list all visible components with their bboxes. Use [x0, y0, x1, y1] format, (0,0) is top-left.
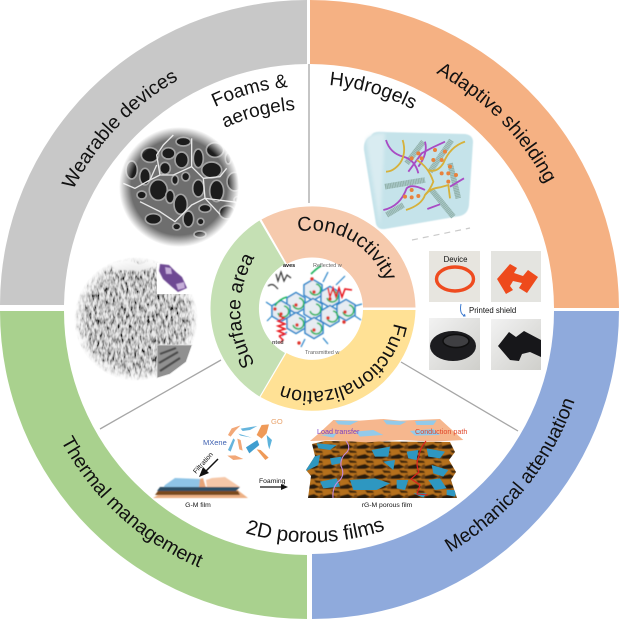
image: hydrogel cube: [364, 132, 473, 240]
labels: flakes: GO: [271, 417, 283, 426]
segment: surface area: [210, 220, 285, 396]
red atoms: [273, 277, 347, 345]
labels: flakes: [203, 417, 283, 447]
image: columnar micrograph: [74, 257, 198, 381]
photo: black ring: [429, 318, 480, 370]
label: transmitted waves: Transmitted w: [305, 350, 339, 356]
absorbed wave swirls: [275, 266, 354, 334]
rG-M film label: rG-M porous film: [362, 502, 413, 509]
G-M film: [153, 477, 248, 498]
label: reflected waves: Reflected w: [313, 263, 342, 269]
heading: foams and aerogels: Foams &: [211, 74, 288, 106]
heading: foams and aerogels: aerogels: [222, 97, 294, 127]
divider lines: [100, 64, 518, 431]
segment: adaptive shielding: [310, 0, 619, 308]
label: absorbed: nted: [272, 340, 284, 346]
image: foam micrograph: [119, 127, 243, 247]
heading: 2D porous films: 2D porous films: [246, 520, 384, 544]
hydrogel polymer strands: [383, 140, 465, 217]
image: 2D porous film schematic: [153, 417, 467, 509]
micrograph texture: [74, 257, 198, 381]
segment: wearable devices: Wearable devices: [61, 72, 177, 186]
segment: conductivity: [262, 206, 416, 308]
photo: black shield block: [491, 319, 541, 370]
lattice spikes: [266, 272, 362, 347]
segment: wearable devices: [0, 0, 307, 305]
inner ring: [210, 206, 416, 411]
load transfer path: [333, 441, 349, 498]
segment: conductivity: Conductivity: [298, 216, 395, 278]
conduction path: [411, 441, 428, 495]
segment: mechanical attenuation: [312, 311, 619, 619]
top sheet: [310, 419, 463, 442]
segment: mechanical attenuation: Mechanical attenuation: [444, 399, 574, 552]
honeycomb lattice: [272, 280, 355, 338]
conduction path label: Conduction path: [415, 427, 467, 436]
label: printed shield: Printed shield: [469, 306, 516, 315]
label: device: Device: [444, 255, 467, 264]
segment: adaptive shielding: Adaptive shielding: [436, 64, 554, 184]
segment: functionalization: Functionalization: [280, 324, 407, 406]
segment: thermal management: [0, 311, 307, 619]
label: waves: aves: [283, 263, 295, 269]
heading: foams and aerogels: [211, 74, 294, 127]
rG-M porous film: [305, 419, 467, 500]
photo: red shield block: [491, 251, 541, 302]
load transfer label: Load transfer: [317, 427, 360, 436]
labels: flakes: MXene: [203, 438, 227, 447]
image: printed shield photos: [429, 251, 541, 370]
inset: lower micrograph: [157, 345, 192, 378]
crosslink nodes: [403, 148, 458, 199]
center: honeycomb absorption schematic: [266, 263, 362, 356]
segment: surface area: Surface area: [228, 254, 254, 368]
G-M film label: G-M film: [185, 502, 211, 509]
segment: thermal management: Thermal management: [63, 434, 203, 568]
flake group: GO and MXene: [227, 424, 272, 460]
filtration arrow: Filtration: [192, 451, 215, 475]
heading: hydrogels: Hydrogels: [330, 72, 416, 108]
inset: purple crystal: [157, 263, 193, 294]
foaming arrow: [259, 478, 288, 490]
transmitted red wave: [278, 316, 285, 343]
reflected red wave: [328, 288, 352, 297]
foaming arrow: Foaming: [259, 478, 286, 485]
incident black waves: [268, 272, 291, 289]
